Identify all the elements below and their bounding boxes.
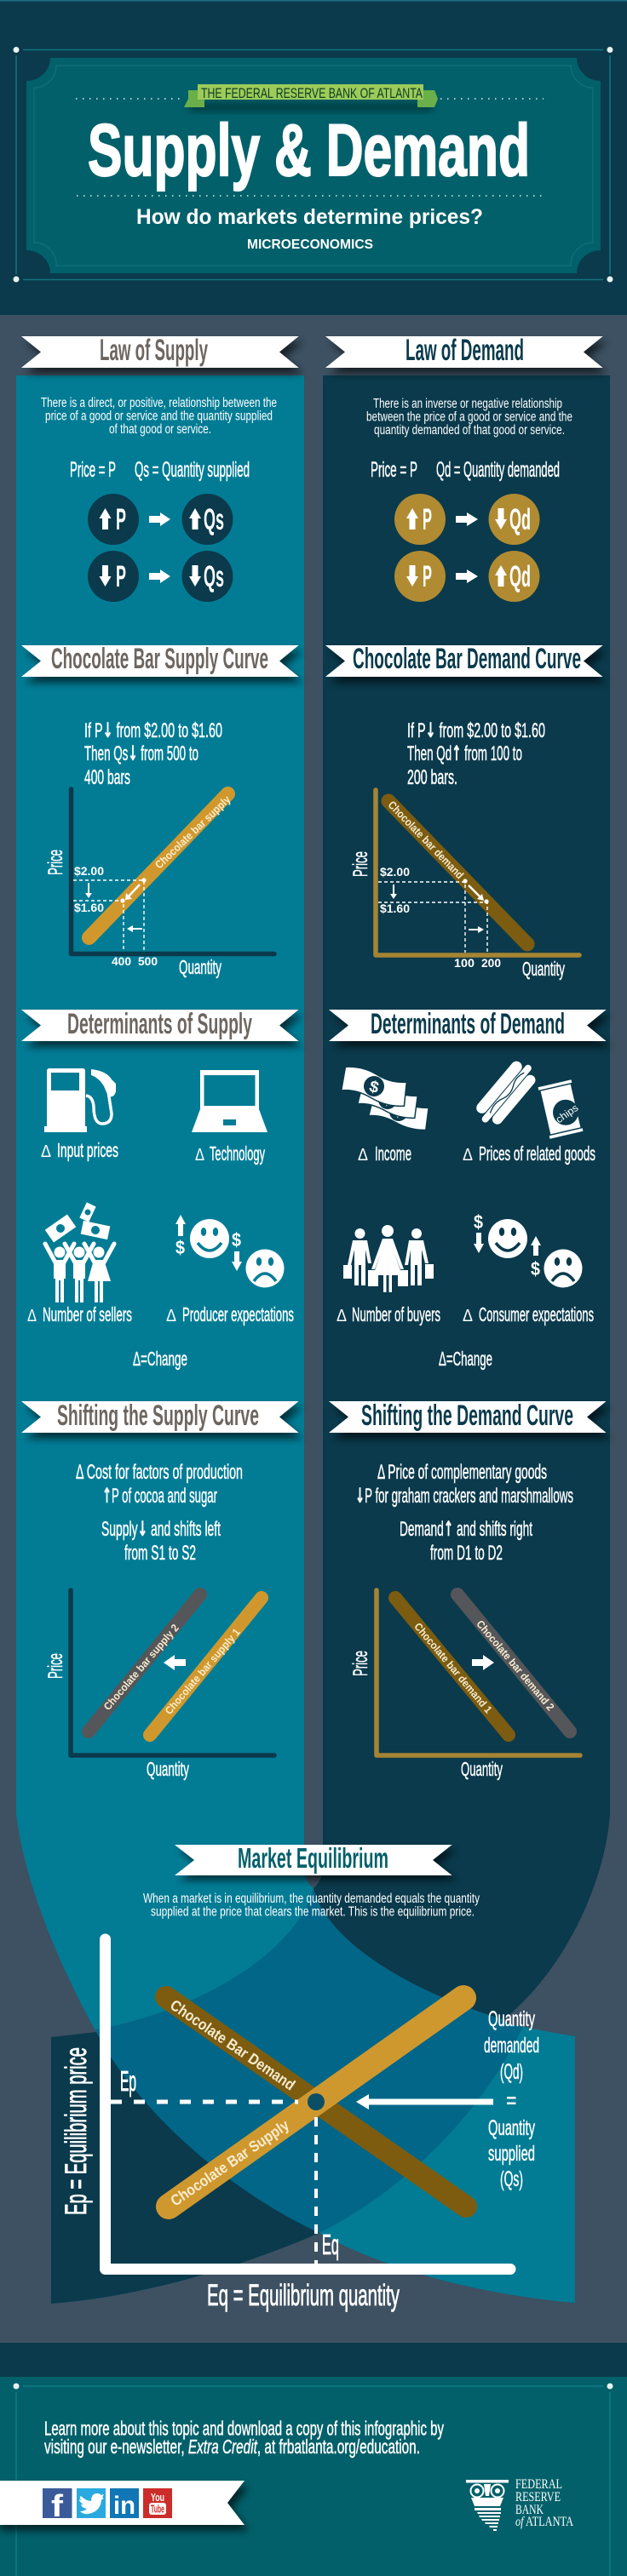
icon: linkedin: in [113,2492,135,2520]
heading ribbon: supply curve: Chocolate Bar Supply Curve [51,643,268,675]
icon: stack of money [339,1064,432,1132]
text: supply curve example: 400 bars [84,766,130,789]
icon: hot dog [471,1056,541,1131]
section: market equilibrium [60,1842,539,2312]
logo: Federal Reserve Bank of Atlanta: FEDERAL [515,2477,562,2492]
label: equilibrium quantity axis: Eq = Equilibrium quantity [207,2279,400,2312]
text: law of supply definition: of that good or service. [109,422,211,437]
heading ribbon: demand curve [325,643,607,683]
diagram: supply relationship circles: P [116,560,126,593]
chart: chocolate bar demand: $1.60 [380,902,410,915]
icon: facebook [43,2488,72,2523]
icon: bag of chips [538,1079,585,1139]
text: demand shift explanation [355,1461,573,1565]
chart: chocolate bar supply: 500 [138,954,158,968]
footer text: visiting our e-newsletter, Extra Credit, at frbatlanta.org/education. [44,2436,420,2458]
arrow to equilibrium [356,2094,493,2109]
label: equilibrium price axis: Ep = Equilibrium price [60,2047,93,2215]
label: technology: Technology [210,1142,265,1165]
text: law of supply definition [41,396,277,437]
supply curve bar [168,1998,463,2209]
label: number of sellers: Δ [27,1307,37,1325]
section: shifting the demand curve [329,1400,611,1780]
text: supply curve example [84,718,222,789]
callout: quantity demanded equals quantity supplied [484,2007,539,2191]
heading ribbon: supply curve [21,643,303,683]
green ribbon [184,84,438,111]
left outer curve [0,1805,96,2316]
chart: chocolate bar demand [349,790,579,980]
label: producer expectations [166,1303,294,1325]
label: consumer expectations: Δ [463,1307,473,1325]
diagram: demand relationship circles: P [423,560,432,593]
logo: Federal Reserve Bank of Atlanta: of ATLANTA [515,2515,574,2529]
section: chocolate bar supply curve [21,643,303,978]
text: supply shift explanation: Supply↓ and shifts left [101,1517,221,1541]
callout: quantity demanded equals quantity supplied: (Qs) [500,2167,523,2191]
icon: consumer expectations: $ [531,1258,540,1279]
footer [0,2343,627,2576]
icon: bag of chips: chips [554,1102,580,1125]
text: supply shift explanation [76,1461,243,1565]
chart: supply shift: Price [44,1653,67,1679]
text: demand curve example: Then Qd↑ from 100 to [407,741,522,765]
icon: sellers with money [45,1202,114,1302]
label: technology [195,1142,265,1165]
diagram: supply relationship circles: Qs [204,503,224,536]
section: determinants of supply [21,1008,303,1370]
header frame [14,47,613,283]
diagram: demand relationship circles: Qd [509,503,531,536]
icon: youtube: Tube [151,2503,164,2515]
heading ribbon: shifting demand [329,1400,611,1439]
title plaque [26,58,601,273]
heading ribbon: determinants of supply: Determinants of Supply [67,1008,252,1040]
chart: chocolate bar demand: Quantity [522,958,565,980]
chart: chocolate bar demand: Chocolate bar demand [386,799,466,881]
key: supply symbols [70,458,250,482]
logo: Federal Reserve Bank of Atlanta [466,2477,574,2531]
label: consumer expectations [463,1303,594,1325]
chart: market equilibrium [60,1939,539,2312]
chart: market equilibrium: Ep [120,2065,136,2097]
label: number of sellers: Number of sellers [43,1303,132,1325]
panel: supply column [16,375,314,2036]
heading ribbon: shifting supply [21,1400,303,1439]
heading ribbon: law of supply [21,334,303,374]
key: supply symbols: Price = P [70,458,116,482]
text: equilibrium definition [143,1892,480,1919]
footer text [44,2418,444,2458]
callout: quantity demanded equals quantity supplied: supplied [488,2142,535,2166]
header band [0,0,627,315]
panel: demand column [314,375,610,2043]
label: income [358,1142,411,1165]
text: supply shift explanation: ↑P of cocoa and sugar [102,1484,217,1508]
chart: demand shift: Quantity [461,1758,503,1780]
demand curve bar [166,1996,466,2207]
callout: quantity demanded equals quantity supplied: (Qd) [500,2060,523,2084]
right outer curve [501,1805,627,2316]
label: number of buyers [337,1303,440,1325]
diagram: supply relationship circles: P [116,503,126,536]
logo: Federal Reserve Bank of Atlanta: RESERVE [515,2490,561,2504]
text: demand shift explanation: from D1 to D2 [430,1542,503,1565]
key: demand symbols: Price = P [371,458,417,482]
icon: youtube [143,2488,172,2518]
note: delta means change: Δ=Change [133,1348,187,1370]
section: shifting the supply curve [21,1400,303,1780]
text: equilibrium definition: When a market is in equilibrium, the quantity demanded equals the quantity [143,1892,480,1906]
chart: supply shift [44,1590,274,1780]
icon: youtube: You [151,2491,164,2504]
icon: column capital [466,2480,509,2531]
label: prices of related goods: Δ [463,1146,473,1165]
callout: quantity demanded equals quantity supplied: Quantity [488,2007,535,2031]
chart: chocolate bar supply: Chocolate bar supply [152,793,233,871]
text: supply curve example: If P↓ from $2.00 to $1.60 [84,718,222,742]
icon: consumer expectations [474,1211,583,1287]
label: input prices: Δ [41,1142,51,1161]
text: law of demand definition: There is an inverse or negative relationship [373,397,562,411]
icon: gas pump [44,1068,116,1132]
section: determinants of demand [329,1008,611,1370]
heading ribbon: law of demand: Law of Demand [406,334,524,367]
chart: supply shift: Quantity [147,1758,189,1780]
label: input prices [41,1139,118,1161]
label: income: Income [375,1142,411,1165]
equilibrium point [308,2093,325,2110]
kicker: MICROECONOMICS [247,238,373,252]
chart: demand shift [349,1590,580,1780]
text: supply shift explanation: from S1 to S2 [124,1542,196,1565]
logo: Federal Reserve Bank of Atlanta: BANK [515,2503,544,2517]
chart: demand shift: Chocolate bar demand 1 [411,1621,494,1715]
section: chocolate bar demand curve [325,643,607,980]
heading ribbon: law of supply: Law of Supply [100,334,208,367]
icon: twitter [77,2488,106,2518]
callout: quantity demanded equals quantity supplied: demanded [484,2034,539,2058]
chart: demand shift: Chocolate bar demand 2 [474,1618,556,1713]
chart: chocolate bar supply: Price [44,850,67,875]
icon: laptop [192,1070,267,1132]
chart: chocolate bar demand: $2.00 [380,865,410,879]
text: law of supply definition: price of a good or service and the quantity supplied [45,409,273,424]
label: technology: Δ [195,1146,204,1165]
text: demand curve example: 200 bars. [407,766,457,789]
text: supply curve example: Then Qs↓ from 500 to [84,741,198,765]
heading ribbon: determinants of demand [329,1008,611,1047]
chart: supply shift: Chocolate bar supply 2 [101,1622,181,1713]
text: law of demand definition [366,397,572,438]
note: delta means change: Δ=Change [439,1348,492,1370]
equilibrium price guide line [111,2099,298,2104]
icon: producer expectations: $ [175,1237,185,1258]
chart: supply shift: Chocolate bar supply 1 [163,1626,243,1717]
chart: chocolate bar demand: 200 [481,956,501,970]
heading ribbon: determinants of supply [21,1008,303,1047]
label: number of sellers [27,1303,132,1325]
text: demand shift explanation: Demand↑ and shifts right [400,1517,532,1541]
chart: market equilibrium: Eq [322,2229,339,2260]
social media ribbon [0,2481,249,2531]
footer frame [14,2384,613,2576]
section: law of demand [325,334,607,602]
key: demand symbols [371,458,560,482]
text: law of supply definition: There is a direct, or positive, relationship between the [41,396,277,410]
diagram: demand relationship circles: P [423,503,432,536]
text: equilibrium definition: supplied at the price that clears the market. This is the equilibrium price. [151,1905,475,1919]
label: number of buyers: Δ [337,1307,347,1325]
text: demand curve example [407,718,545,789]
label: income: Δ [358,1146,368,1165]
key: supply symbols: Qs = Quantity supplied [135,458,250,482]
section: law of supply [21,334,303,602]
icon: stack of money: $ [367,1078,381,1097]
heading ribbon: law of demand [325,334,607,374]
chart: chocolate bar supply: 400 [112,954,131,968]
diagram: demand relationship circles [394,494,540,602]
demand curve bar: Chocolate Bar Demand [167,1996,298,2093]
diagram: demand relationship circles: Qd [509,560,531,593]
text: supply shift explanation: Δ Cost for factors of production [76,1461,243,1484]
chart: chocolate bar supply [44,789,274,978]
callout: quantity demanded equals quantity supplied: Quantity [488,2116,535,2140]
text: law of demand definition: quantity demanded of that good or service. [374,423,565,438]
equilibrium quantity guide line [314,2117,318,2264]
icon: producer expectations [175,1215,285,1287]
icon: buyers with bags [343,1225,434,1292]
heading ribbon: market equilibrium: Market Equilibrium [238,1842,388,1874]
diagram: supply relationship circles: Qs [204,560,224,593]
icon: linkedin [110,2488,139,2520]
label: number of buyers: Number of buyers [352,1303,440,1325]
chart: chocolate bar supply: Quantity [179,956,221,978]
chart: chocolate bar demand: Price [349,851,372,877]
chart: chocolate bar supply: $2.00 [74,864,104,878]
subtitle: How do markets determine prices? [136,205,483,229]
icon: stack of money: $ [383,1093,394,1109]
heading ribbon: shifting supply: Shifting the Supply Curve [57,1400,259,1432]
chart: chocolate bar demand: 100 [454,956,475,970]
axes [106,1939,510,2270]
green ribbon: THE FEDERAL RESERVE BANK OF ATLANTA [201,85,423,101]
supply curve bar: Chocolate Bar Supply [168,2116,292,2209]
label: input prices: Input prices [57,1139,118,1161]
icon: facebook: f [51,2488,64,2523]
heading ribbon: market equilibrium [175,1842,457,1880]
icon: producer expectations: $ [232,1229,241,1251]
text: demand curve example: If P↓ from $2.00 to $1.60 [407,718,545,742]
diagram: supply relationship circles [88,494,233,602]
chart: chocolate bar supply: $1.60 [74,901,104,914]
icon: consumer expectations: $ [474,1211,483,1233]
chart: demand shift: Price [349,1651,372,1676]
icon: stack of money: $ [394,1105,405,1121]
label: producer expectations: Δ [166,1307,176,1325]
equilibrium background shapes [34,1888,596,2316]
label: producer expectations: Producer expectations [182,1303,294,1325]
